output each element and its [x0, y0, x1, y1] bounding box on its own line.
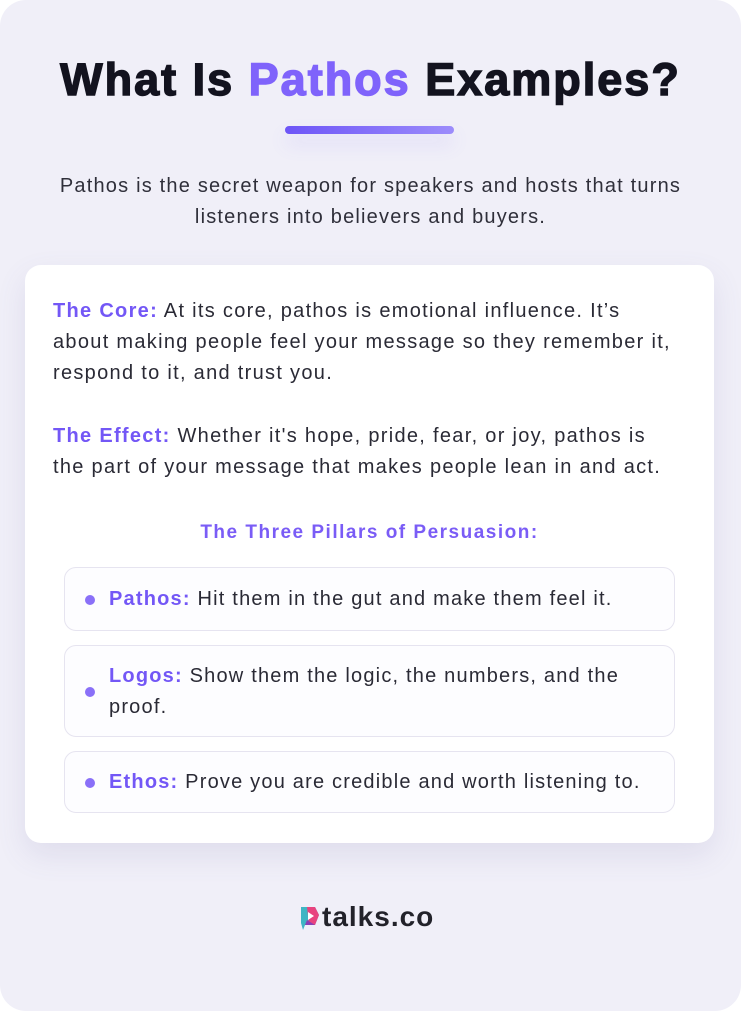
text: the core: The Core: At its core, pathos is emotional influence. It’s — [53, 300, 620, 322]
text: the effect — [53, 425, 661, 478]
title underline bar — [285, 126, 454, 134]
pillar: logos — [64, 645, 675, 737]
pillar: logos: Logos: Show them the logic, the numbers, and the — [109, 665, 619, 687]
pillar: pathos: Pathos: Hit them in the gut and make them feel it. — [109, 588, 613, 610]
title: What Is Pathos Examples? — [60, 54, 681, 105]
text: the core — [53, 300, 671, 384]
logo: talks.co: talks.co — [322, 901, 434, 932]
pillar: pathos — [64, 567, 675, 631]
text: the effect: the part of your message that makes people lean in and act. — [53, 456, 661, 478]
subtitle — [60, 175, 681, 228]
pillar: ethos — [64, 751, 675, 813]
subtitle: listeners into believers and buyers. — [195, 206, 546, 228]
panel: main card — [25, 265, 714, 843]
subtitle: Pathos is the secret weapon for speakers and hosts that turns — [60, 175, 681, 197]
text: the core: about making people feel your message so they remember it, — [53, 331, 671, 353]
text: the core: respond to it, and trust you. — [53, 362, 333, 384]
pillar: ethos: Ethos: Prove you are credible and worth listening to. — [109, 771, 641, 793]
pillar: logos: proof. — [109, 696, 167, 718]
text: the effect: The Effect: Whether it's hope, pride, fear, or joy, pathos is — [53, 425, 646, 447]
heading: three pillars: The Three Pillars of Persuasion: — [200, 522, 539, 543]
